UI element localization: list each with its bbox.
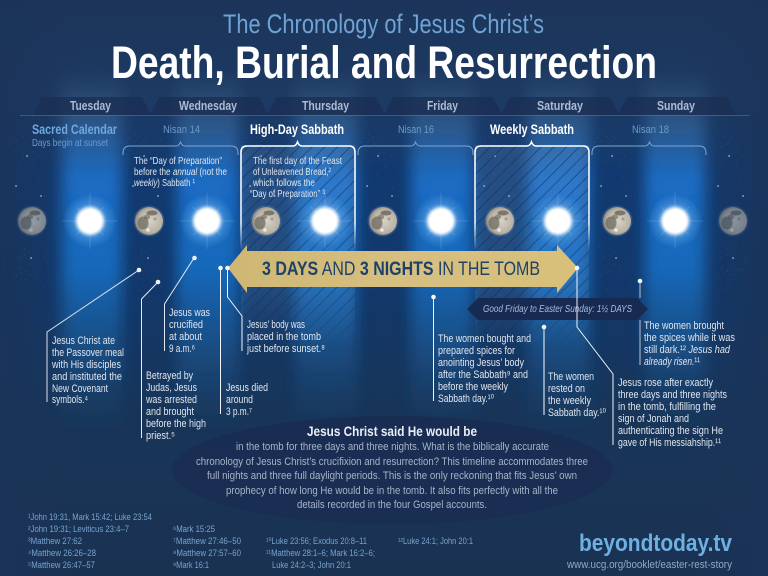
callout: died around 3 p.m.: Jesus died <box>226 382 268 394</box>
daylight light columns <box>60 72 707 432</box>
callout: women rested: rested on <box>548 383 585 395</box>
tab: Friday <box>384 97 502 115</box>
callout: body placed in the tomb: Jesus’ body was <box>247 319 305 331</box>
callout: betrayed by Judas: before the high <box>146 418 206 430</box>
footnotes column 3: Luke 24:2–3; John 20:1 <box>272 560 351 570</box>
note: day of preparation <box>134 155 227 189</box>
sun <box>647 193 703 249</box>
Wednesday: Wednesday <box>179 98 238 113</box>
moon <box>16 206 48 236</box>
footnotes column 2 <box>173 524 241 570</box>
callout: Jesus rose: in the tomb, fulfilling the <box>618 401 716 413</box>
calendar labels <box>163 121 669 137</box>
callout: crucified at 9 a.m.: crucified <box>169 319 203 331</box>
callout: spices while still dark: already risen.¹¹ <box>644 356 700 368</box>
footnotes column 1: ⁵Matthew 26:47–57 <box>28 560 95 570</box>
callout: women bought spices: Sabbath day.¹⁰ <box>438 393 494 405</box>
callout: spices while still dark: The women brought <box>644 320 724 332</box>
day names <box>70 98 696 113</box>
callout: spices while still dark <box>638 279 735 368</box>
callout: betrayed by Judas: was arrested <box>145 394 197 406</box>
note: day of preparation: before the annual (not the <box>134 166 227 178</box>
banner: good friday to easter sunday: Good Friday to Easter Sunday: 1½ DAYS <box>483 303 632 315</box>
footnotes column 2: ⁸Matthew 27:57–60 <box>173 548 241 558</box>
callout: women rested: The women <box>548 371 594 383</box>
Friday: Friday <box>427 98 459 113</box>
moon <box>718 206 748 236</box>
callout: women rested: the weekly <box>548 395 591 407</box>
footnotes column 2: ⁹Mark 16:1 <box>173 560 209 570</box>
moon <box>250 206 282 236</box>
sun <box>297 193 353 249</box>
title <box>111 9 657 88</box>
website branding <box>566 530 733 571</box>
body text: full nights and three full daylight periods. This is the only reckoning that fits Jesus’ own <box>207 470 577 482</box>
suns and moons row <box>16 193 748 249</box>
callout: body placed in the tomb: just before sunset.⁸ <box>246 343 325 355</box>
arrow: 3 days and 3 nights in the tomb: 3 DAYS AND 3 NIGHTS IN THE TOMB <box>262 259 540 280</box>
callout: body placed in the tomb <box>225 266 325 355</box>
footnotes <box>28 512 473 570</box>
callout: passover meal: New Covenant <box>52 383 108 395</box>
footnotes column 3: ¹¹Matthew 28:1–6; Mark 16:2–6; <box>266 548 375 558</box>
callout: crucified at 9 a.m.: 9 a.m.⁶ <box>169 343 195 355</box>
sun <box>179 193 235 249</box>
Nisan 14: Nisan 14 <box>163 124 200 136</box>
bracket: Nisan 14 <box>123 142 238 155</box>
bracket: Weekly Sabbath <box>475 142 589 250</box>
callout: betrayed by Judas: priest.⁵ <box>146 430 175 442</box>
subtitle line: The Chronology of Jesus Christ’s <box>223 9 544 39</box>
panel: high-day sabbath striped highlight <box>241 145 355 324</box>
sacred calendar heading: Days begin at sunset <box>32 137 108 149</box>
moon <box>134 206 164 236</box>
footnotes column 1: ⁴Matthew 26:26–28 <box>28 548 96 558</box>
Thursday: Thursday <box>302 98 350 113</box>
callout: passover meal: Jesus Christ ate <box>52 335 115 347</box>
body text <box>196 441 588 511</box>
callout: Jesus rose: three days and three nights <box>618 389 727 401</box>
callout: Jesus rose: authenticating the sign He <box>618 425 723 437</box>
footnotes column 1: ¹John 19:31, Mark 15:42; Luke 23:54 <box>28 512 152 522</box>
callout: women bought spices: before the weekly <box>438 381 508 393</box>
tab: Wednesday <box>150 97 268 115</box>
note: first day of the feast: “Day of Preparation” ³ <box>250 188 325 200</box>
footnotes column 3 <box>266 536 375 570</box>
panel: Jesus Christ said He would be <box>172 416 612 524</box>
footnotes column 2: ⁶Mark 15:25 <box>173 524 215 534</box>
main title: Death, Burial and Resurrection <box>111 37 657 88</box>
callout: Jesus rose: gave of His messiahship.¹¹ <box>618 437 721 449</box>
callout: women bought spices: The women bought and <box>438 333 531 345</box>
callout: women rested <box>542 325 606 419</box>
website branding: beyondtoday.tv <box>579 530 733 557</box>
callout: women bought spices: after the Sabbath⁹ and <box>438 369 528 381</box>
note: first day of the feast <box>250 155 342 200</box>
callout: body placed in the tomb: placed in the tomb <box>247 331 321 343</box>
note: day of preparation: The “Day of Preparation” <box>134 155 222 167</box>
star fields <box>12 130 757 305</box>
footnotes column 2: ⁷Matthew 27:46–50 <box>173 536 241 546</box>
callout: women bought spices <box>431 295 531 405</box>
callout: Jesus rose: sign of Jonah and <box>618 413 689 425</box>
callout: spices while still dark: the spices while it was <box>644 332 735 344</box>
banner: good friday to easter sunday <box>467 298 648 320</box>
callout: passover meal: symbols.⁴ <box>52 394 88 406</box>
tab: Tuesday <box>33 97 151 115</box>
sun <box>530 193 586 249</box>
Saturday: Saturday <box>537 98 584 113</box>
callout: passover meal: the Passover meal <box>52 347 124 359</box>
heading: Jesus Christ said He would be <box>307 423 477 439</box>
day tabs row <box>33 97 736 115</box>
Nisan 16: Nisan 16 <box>398 124 434 136</box>
tab: Sunday <box>618 97 736 115</box>
callout: passover meal <box>47 268 141 406</box>
callout: betrayed by Judas <box>142 280 206 442</box>
callout: died around 3 p.m.: 3 p.m.⁷ <box>226 406 252 418</box>
callout: passover meal: with His disciples <box>51 359 121 371</box>
sacred calendar heading: Sacred Calendar <box>32 121 117 137</box>
footnotes column 1 <box>28 512 152 570</box>
note: first day of the feast: of Unleavened Bread,² <box>253 166 331 178</box>
callout: betrayed by Judas: Judas, Jesus <box>146 382 197 394</box>
body text: in the tomb for three days and three nights. What is the biblically accurate <box>236 441 549 453</box>
moon <box>602 206 632 236</box>
sacred calendar heading <box>32 121 117 149</box>
note: day of preparation: weekly) Sabbath ¹ <box>134 177 195 189</box>
callout: women bought spices: prepared spices for <box>438 345 515 357</box>
High-Day Sabbath: High-Day Sabbath <box>250 121 344 137</box>
callout: betrayed by Judas: and brought <box>146 406 194 418</box>
brackets <box>123 142 706 250</box>
panel: weekly sabbath striped highlight <box>475 145 589 324</box>
callout: women bought spices: anointing Jesus’ body <box>438 357 524 369</box>
callout: crucified at 9 a.m. <box>164 256 210 355</box>
callout: betrayed by Judas: Betrayed by <box>146 370 193 382</box>
Sunday: Sunday <box>657 98 696 113</box>
sun <box>62 193 118 249</box>
callout: died around 3 p.m.: around <box>226 394 253 406</box>
bracket: Nisan 18 <box>592 142 706 155</box>
callout: spices while still dark: still dark.¹² Jesus had <box>644 344 731 356</box>
footnotes column 1: ²John 19:31; Leviticus 23:4–7 <box>28 524 129 534</box>
callout: crucified at 9 a.m.: Jesus was <box>169 307 210 319</box>
footnotes column 4: ¹²Luke 24:1; John 20:1 <box>398 536 473 546</box>
Tuesday: Tuesday <box>70 98 112 113</box>
arrow: 3 days and 3 nights in the tomb <box>228 245 578 293</box>
body text: prophecy of how long He would be in the tomb. It also fits perfectly with all the <box>226 485 558 497</box>
note: first day of the feast: which follows the <box>252 177 315 189</box>
tab: Saturday <box>501 97 619 115</box>
tab: Thursday <box>267 97 385 115</box>
Weekly Sabbath: Weekly Sabbath <box>490 121 574 137</box>
Nisan 18: Nisan 18 <box>632 124 669 136</box>
sun <box>413 193 469 249</box>
footnotes column 1: ³Matthew 27:62 <box>28 536 82 546</box>
bracket: High-Day Sabbath <box>241 142 355 250</box>
bracket: Nisan 16 <box>358 142 473 155</box>
callout: Jesus rose: Jesus rose after exactly <box>618 377 713 389</box>
moon <box>368 206 398 236</box>
callout: crucified at 9 a.m.: at about <box>169 331 202 343</box>
callout: women rested: Sabbath day.¹⁰ <box>548 407 606 419</box>
callout: passover meal: and instituted the <box>52 371 122 383</box>
note: first day of the feast: The first day of the Feast <box>253 155 342 167</box>
body text: chronology of Jesus Christ’s crucifixion and resurrection? This timeline accommodates three <box>196 456 588 468</box>
callout: Jesus rose <box>575 266 727 449</box>
moon <box>484 206 516 236</box>
callout: died around 3 p.m. <box>218 266 268 418</box>
body text: details recorded in the four Gospel accounts. <box>297 499 487 511</box>
footnotes column 3: ¹⁰Luke 23:56; Exodus 20:8–11 <box>266 536 367 546</box>
website branding: www.ucg.org/booklet/easter-rest-story <box>566 559 732 571</box>
